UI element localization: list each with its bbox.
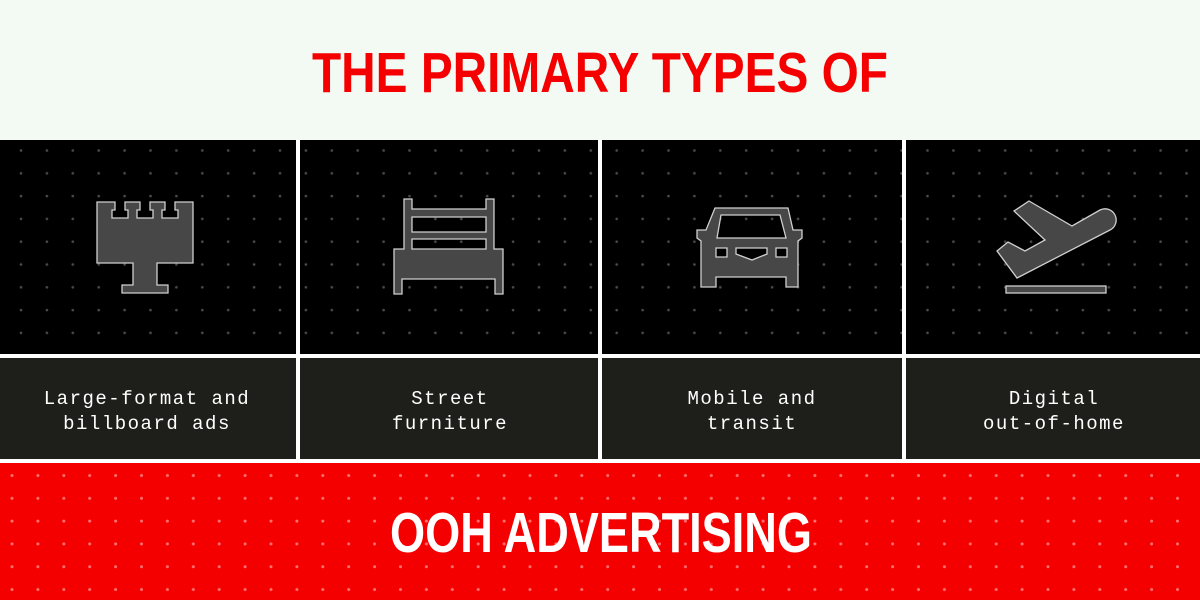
title: THE PRIMARY TYPES OF xyxy=(312,41,888,105)
label: street furniture: furniture xyxy=(392,413,508,435)
label: mobile and transit: transit xyxy=(707,413,797,435)
label: large-format: Large-format and xyxy=(44,388,250,410)
label: digital out-of-home: Digital xyxy=(1009,388,1099,410)
label: large-format: billboard ads xyxy=(63,413,231,435)
subtitle: OOH ADVERTISING xyxy=(390,501,812,565)
label: digital out-of-home: out-of-home xyxy=(983,413,1125,435)
icon: billboard tower xyxy=(97,202,193,293)
icon: car xyxy=(697,208,802,287)
icon: airplane xyxy=(997,201,1116,293)
label: street furniture: Street xyxy=(411,388,489,410)
icon: street bench xyxy=(394,199,503,294)
label: mobile and transit: Mobile and xyxy=(687,388,817,410)
